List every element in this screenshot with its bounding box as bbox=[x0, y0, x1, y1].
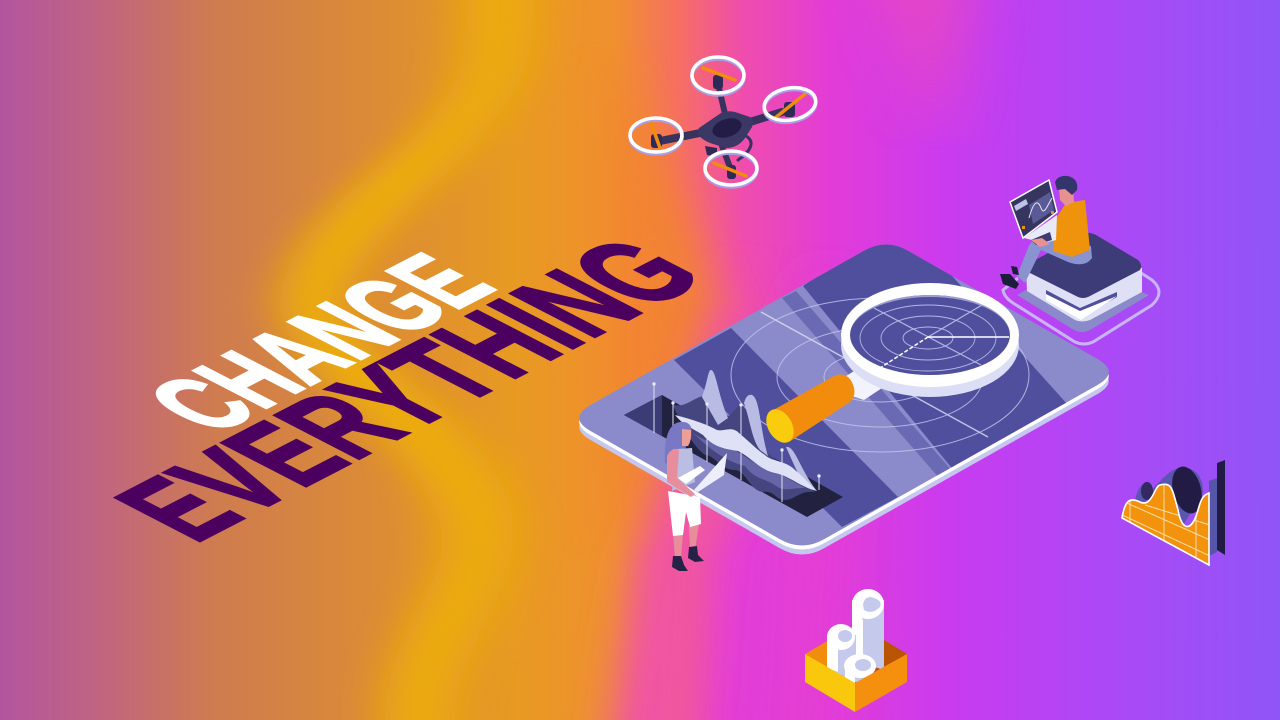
box right face bbox=[855, 654, 907, 712]
magnifying glass bbox=[761, 283, 1019, 448]
chart pit bbox=[624, 370, 843, 517]
handle neck bbox=[843, 366, 882, 400]
shoes bbox=[672, 556, 688, 571]
area outline bbox=[1122, 484, 1209, 565]
orange area bbox=[1122, 484, 1209, 565]
tablet white edge bbox=[579, 248, 1109, 550]
title: CHANGE: CHANGE bbox=[120, 240, 521, 447]
pedestal outline bbox=[1003, 271, 1159, 344]
laptop bbox=[694, 453, 727, 492]
area grid bbox=[1123, 485, 1208, 558]
chart back peaks bbox=[702, 370, 728, 425]
box left face bbox=[805, 654, 855, 712]
tablet surface bbox=[579, 244, 1109, 546]
laptop screen bbox=[1010, 180, 1057, 238]
area chart icon bbox=[1120, 460, 1225, 565]
prop guard rings bbox=[630, 57, 818, 187]
drone icon bbox=[630, 57, 818, 187]
lens glass bbox=[850, 295, 1010, 375]
drone arms bbox=[660, 88, 782, 170]
tablet thickness bbox=[579, 254, 1109, 554]
chart poles bbox=[653, 383, 820, 502]
tank top bbox=[672, 448, 695, 491]
landing block bbox=[705, 146, 717, 157]
motors bbox=[651, 75, 795, 179]
chart ribbon bbox=[675, 415, 817, 491]
drone body bbox=[698, 111, 753, 148]
white pants bbox=[668, 491, 701, 536]
lens ring thickness bbox=[841, 293, 1019, 397]
laptop screen chart bbox=[1029, 192, 1054, 224]
orange handle bbox=[768, 375, 854, 442]
main tablet bbox=[579, 230, 1109, 554]
box inner right bbox=[860, 640, 907, 680]
pedestal top bbox=[1025, 233, 1141, 298]
dark bar bbox=[1217, 460, 1225, 555]
lens ring bbox=[841, 283, 1019, 387]
tall roll bbox=[852, 589, 884, 670]
pedestal side bbox=[1026, 268, 1142, 322]
hands bbox=[1031, 238, 1050, 247]
man trousers bbox=[1017, 238, 1092, 283]
title: EVERYTHING: EVERYTHING bbox=[85, 222, 735, 558]
hair bbox=[665, 422, 691, 464]
chart mountains bbox=[672, 396, 815, 500]
legs bbox=[673, 533, 683, 558]
woman with laptop bbox=[665, 422, 727, 571]
handle cap bbox=[761, 404, 799, 448]
radar circles bbox=[731, 298, 1029, 452]
propellers bbox=[650, 68, 805, 176]
box inner left bbox=[805, 625, 855, 680]
pedestal base bbox=[1017, 265, 1149, 332]
laptop keyboard bbox=[1024, 215, 1057, 243]
man shoes bbox=[1000, 274, 1019, 289]
short roll bbox=[827, 624, 856, 680]
arm bbox=[667, 449, 695, 497]
paper rolls box bbox=[805, 589, 907, 712]
man shirt bbox=[1053, 200, 1090, 257]
man head bbox=[1059, 188, 1074, 206]
surface stripes bbox=[674, 230, 1068, 527]
face bbox=[682, 429, 691, 446]
lens radar lines bbox=[860, 305, 1009, 371]
front roll bbox=[843, 654, 876, 683]
back blobs bbox=[1135, 467, 1203, 530]
person on pedestal bbox=[1000, 176, 1159, 344]
